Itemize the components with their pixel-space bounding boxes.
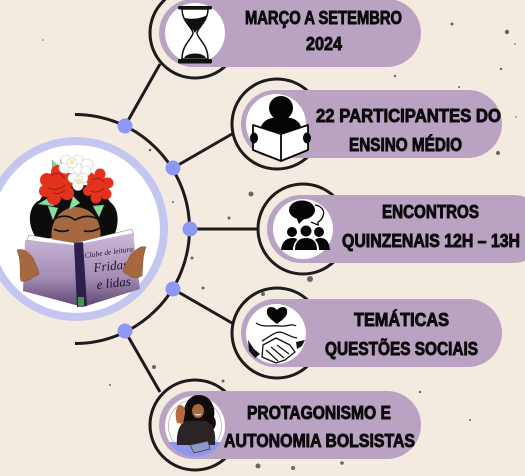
panel: period <box>150 0 421 78</box>
panel: protagonism <box>150 380 421 470</box>
red roses <box>39 165 114 205</box>
book title: Fridas <box>92 256 129 275</box>
book title <box>84 244 134 292</box>
text: themes: QUESTÕES SOCIAIS <box>325 338 478 359</box>
icon: waving student <box>168 395 222 457</box>
hands <box>17 247 146 281</box>
icon: hourglass <box>178 6 212 64</box>
panel: themes <box>232 288 502 378</box>
text: period: 2024 <box>306 34 342 54</box>
panel: participants <box>232 79 502 169</box>
text: meetings: ENCONTROS <box>382 202 479 222</box>
text: protagonism: PROTAGONISMO E <box>247 403 391 423</box>
icon: person reading <box>250 96 311 161</box>
panel: meetings <box>258 184 525 274</box>
icon: heart and handshake <box>248 307 305 363</box>
text: participants <box>316 106 501 155</box>
hair <box>30 184 118 238</box>
connector nodes <box>118 118 198 338</box>
main arc connector <box>75 64 258 392</box>
logo: Frida reading <box>0 141 164 317</box>
book title: e lidas <box>96 273 131 292</box>
ring <box>232 79 322 169</box>
text: participants: 22 PARTICIPANTES DO <box>316 106 501 126</box>
icon: people talking <box>281 200 330 250</box>
ring <box>232 288 322 378</box>
text: period: MARÇO A SETEMBRO <box>245 8 402 28</box>
text: meetings <box>342 202 520 251</box>
text: participants: ENSINO MÉDIO <box>349 134 462 155</box>
book title: Clube de leitura <box>84 244 134 260</box>
white flowers <box>59 155 93 190</box>
text: themes: TEMÁTICAS <box>354 309 449 330</box>
text: period <box>245 8 402 54</box>
ring <box>150 380 240 470</box>
leaves <box>38 158 104 220</box>
text: themes <box>325 309 478 359</box>
face <box>51 207 101 247</box>
eyebrows and eyes <box>53 216 101 231</box>
ring <box>258 184 348 274</box>
ring <box>150 0 240 78</box>
text: protagonism <box>224 403 415 451</box>
text: protagonism: AUTONOMIA BOLSISTAS <box>224 431 415 451</box>
